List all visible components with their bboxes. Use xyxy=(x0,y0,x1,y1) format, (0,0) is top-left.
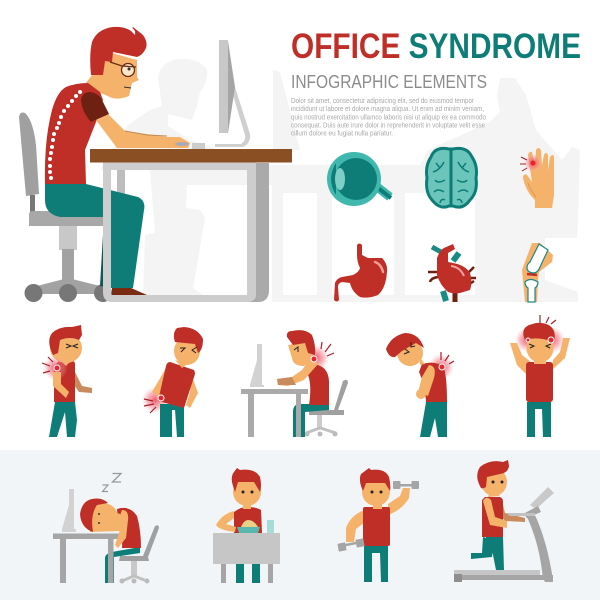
glasses xyxy=(110,62,136,76)
figure: treadmill running xyxy=(454,460,554,582)
chair xyxy=(304,380,348,436)
icon: knee xyxy=(522,243,553,302)
eye and mouth xyxy=(128,68,130,70)
icon: eye xyxy=(327,152,391,206)
figure: dumbbell exercise xyxy=(337,468,419,582)
treadmill xyxy=(454,487,554,582)
paragraph xyxy=(291,98,486,138)
desk frame and top xyxy=(90,149,292,302)
monitor xyxy=(62,489,76,532)
paragraph: consequat. Duis aute irure dolor in reprehenderit in voluptate velit esse xyxy=(291,122,485,130)
ghost silhouettes behind the top section xyxy=(100,59,580,302)
dumbbell lower xyxy=(337,538,365,552)
figure: eating at table xyxy=(213,468,280,583)
main figure at desk xyxy=(19,27,292,302)
icon: stomach xyxy=(334,244,387,302)
monitor xyxy=(250,344,264,387)
figure: shoulder pain xyxy=(42,325,92,437)
paragraph: quis nostrud exercitation ullamco laboris nisi ut aliquip ex ea commodo xyxy=(291,114,486,122)
back desk leg xyxy=(117,168,125,202)
chair xyxy=(119,525,159,584)
icon: brain xyxy=(426,148,476,207)
panel: bottom healthy habits background xyxy=(0,450,600,600)
figure: hip pain xyxy=(142,327,203,437)
icon: hand with pain point xyxy=(520,148,554,208)
figure: neck pain at desk xyxy=(241,330,348,437)
paragraph: cillum dolore eu fugiat nulla pariatur. xyxy=(291,130,393,138)
torso with spine xyxy=(45,83,103,184)
icon: heart xyxy=(428,244,476,302)
dumbbell upper xyxy=(393,481,419,489)
sleeve xyxy=(81,92,109,122)
shoe xyxy=(112,288,147,295)
figure: asleep at desk xyxy=(53,474,159,584)
paragraph: incididunt ut labore et dolore magna aliqua. Ut enim ad minim veniam, xyxy=(291,106,484,113)
far leg xyxy=(100,217,116,288)
figure: headache xyxy=(510,315,570,437)
hair xyxy=(90,27,147,75)
monitor xyxy=(215,40,250,147)
paragraph: Dolor sit amet, consectetur adipisicing elit, sed do eiusmod tempor xyxy=(291,98,475,105)
zzz xyxy=(102,474,121,492)
figure: upper back pain bending xyxy=(386,333,454,437)
neck and head xyxy=(85,53,139,100)
arm xyxy=(96,114,190,148)
trousers xyxy=(45,184,144,288)
subtitle: INFOGRAPHIC ELEMENTS xyxy=(291,71,487,92)
office chair xyxy=(19,112,112,302)
keyboard and mouse xyxy=(192,143,205,149)
